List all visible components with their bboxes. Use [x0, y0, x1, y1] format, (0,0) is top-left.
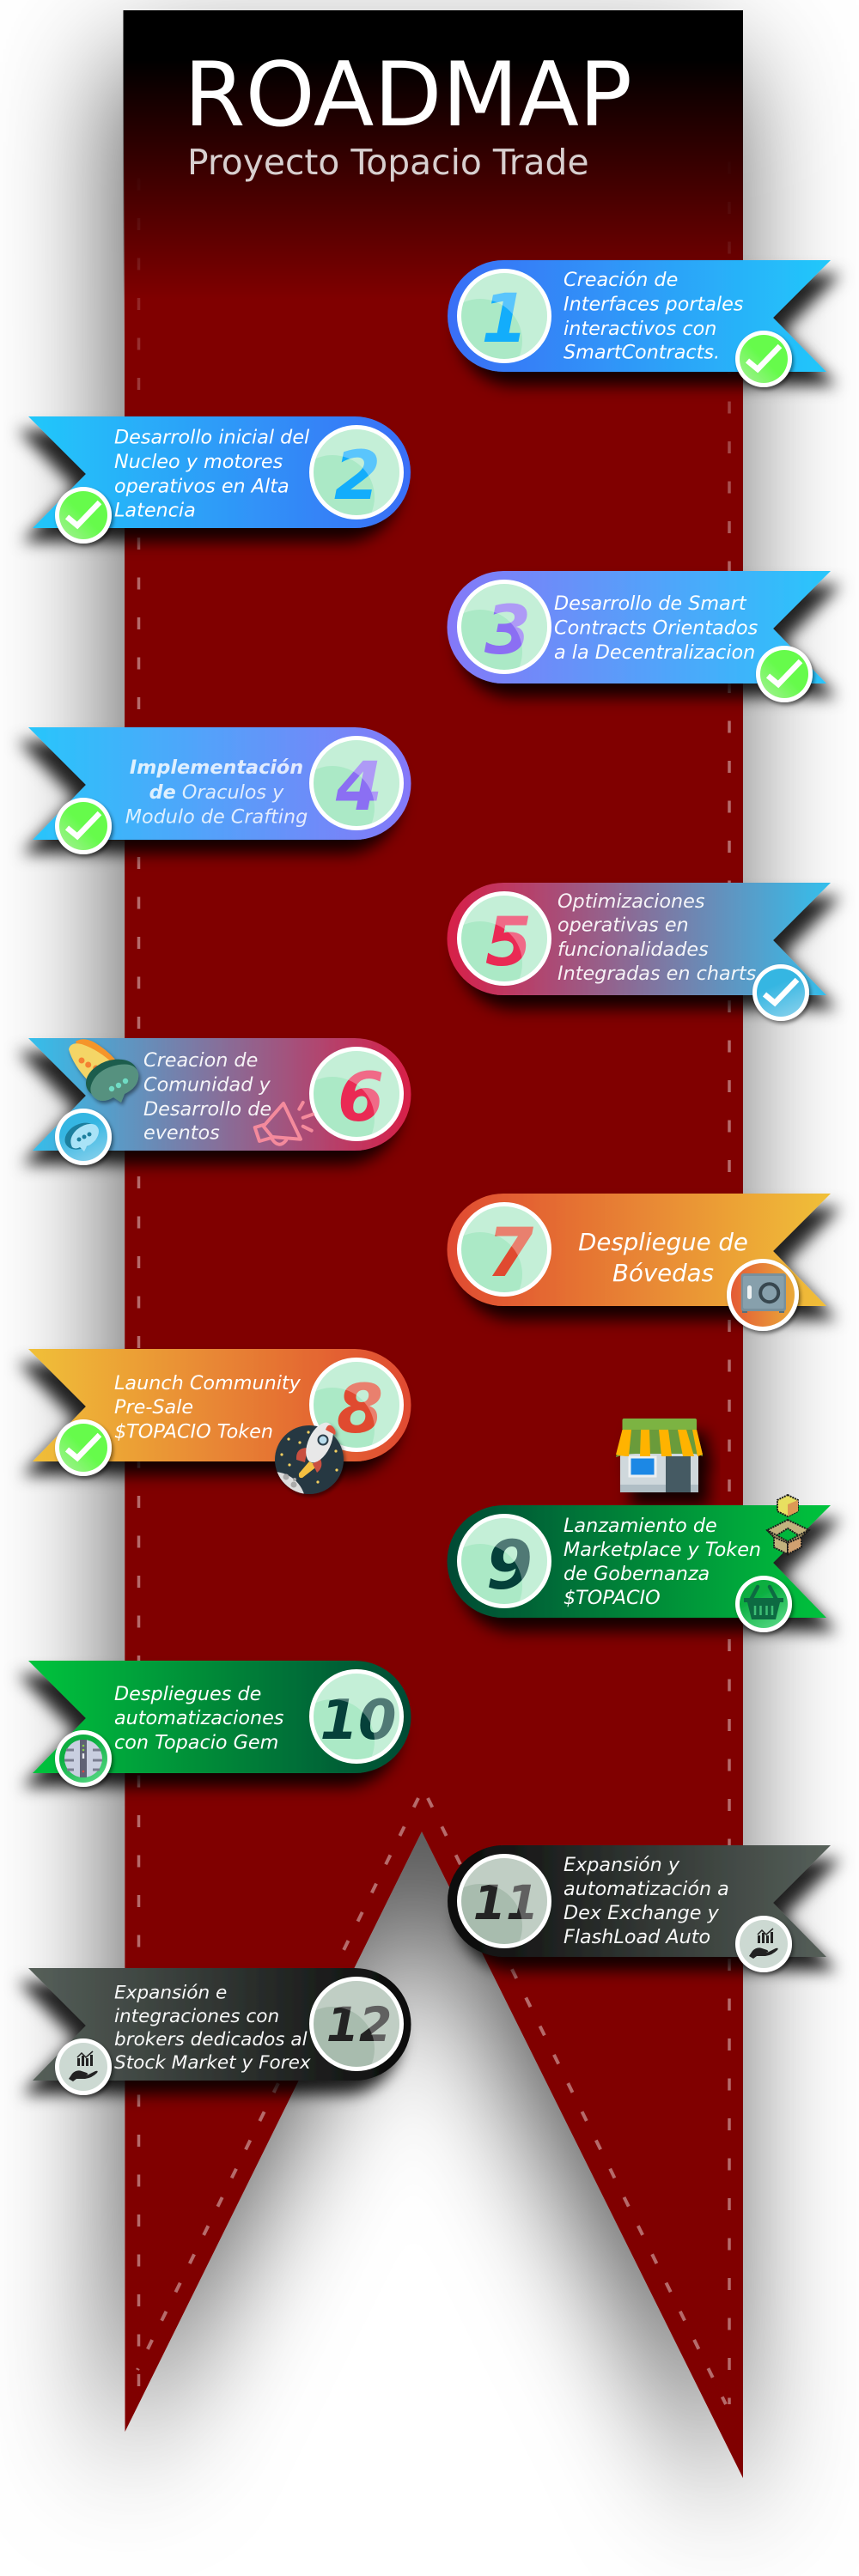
number badge 9: 9 — [486, 1528, 533, 1605]
text 2: Latencia — [114, 500, 196, 522]
ribbon background with shadow — [124, 10, 743, 2478]
banner 8 — [28, 1349, 411, 1461]
number badge 7 — [438, 1202, 551, 1316]
milestone 1 — [438, 260, 831, 387]
text 8: Launch Community — [114, 1372, 302, 1394]
icon: green chat bubble — [81, 1053, 143, 1104]
text 11: automatización a — [564, 1878, 729, 1900]
text 10: automatizaciones — [114, 1707, 284, 1729]
number badge 3 — [457, 580, 551, 674]
banner 9 — [447, 1505, 831, 1618]
text 5: funcionalidades — [557, 939, 709, 961]
text 8: $TOPACIO Token — [114, 1420, 273, 1443]
icon: road badge — [55, 1730, 112, 1787]
milestone 6 — [28, 1038, 411, 1165]
text 2: operativos en Alta — [114, 476, 289, 498]
ribbon top dark gradient — [124, 10, 743, 301]
number badge 6 — [309, 1047, 404, 1141]
text 1: interactivos con — [564, 318, 716, 340]
text 4: de Oraculos y — [149, 781, 283, 804]
icon: yellow chat bubble — [69, 1039, 118, 1082]
number badge 2: 2 — [334, 438, 381, 515]
text 1: SmartContracts. — [564, 342, 720, 364]
icon: rocket — [241, 1419, 344, 1537]
milestone 12 — [28, 1968, 411, 2095]
text 4: Modulo de Crafting — [125, 805, 308, 828]
milestone 5 — [438, 883, 831, 1021]
text 10: con Topacio Gem — [114, 1731, 278, 1753]
number badge 5 — [457, 891, 551, 986]
text 7: Despliegue de — [578, 1228, 748, 1256]
text 5: Integradas en charts — [557, 963, 757, 985]
number badge 7: 7 — [487, 1215, 534, 1292]
banner 6 — [28, 1038, 411, 1151]
text 3: Desarrollo de Smart — [554, 592, 747, 615]
text 6: Creacion de — [143, 1049, 258, 1072]
icon: blue check — [752, 964, 809, 1021]
text 8: Pre-Sale — [114, 1396, 193, 1419]
number badge 12 — [290, 1977, 404, 2091]
banner 5 — [447, 883, 831, 995]
number badge 10: 10 — [320, 1689, 397, 1753]
number badge 1: 1 — [481, 281, 528, 358]
text 6: Comunidad y — [143, 1073, 271, 1096]
number badge 11 — [438, 1854, 551, 1968]
number badge 10 — [290, 1669, 404, 1783]
text 1: Interfaces portales — [564, 294, 744, 316]
banner 3 — [447, 571, 831, 683]
number badge 8 — [290, 1358, 404, 1472]
number badge 4 — [309, 736, 404, 830]
icon: check — [55, 798, 112, 854]
ribbon stitching — [137, 161, 729, 2404]
icon: hand with chart — [735, 1916, 792, 1972]
number badge 12: 12 — [326, 1997, 392, 2052]
milestone 11 — [438, 1845, 831, 1972]
number badge 5: 5 — [485, 904, 532, 981]
title: ROADMAP — [184, 44, 632, 147]
text 5: operativas en — [557, 914, 689, 936]
milestone 8 — [28, 1349, 411, 1537]
icon: megaphone — [255, 1103, 313, 1145]
text 6: eventos — [143, 1121, 220, 1144]
icon: basket — [735, 1576, 792, 1632]
banner 4 — [28, 727, 411, 840]
text 11: Expansión y — [564, 1854, 680, 1876]
number badge 9 — [438, 1514, 551, 1628]
milestone 2 — [28, 416, 411, 544]
text 3: a la Decentralizacion — [554, 641, 755, 664]
text 4: Implementación — [130, 756, 303, 779]
number badge 4: 4 — [335, 749, 382, 826]
text 7: Bóvedas — [612, 1259, 714, 1287]
milestone 4 — [28, 727, 411, 854]
number badge 6: 6 — [338, 1060, 384, 1137]
text 3: Contracts Orientados — [554, 617, 758, 639]
text 2: Desarrollo inicial del — [114, 426, 310, 448]
milestone 9 — [438, 1495, 831, 1632]
text 9: Marketplace y Token — [564, 1539, 761, 1561]
icon: pixel gem — [777, 1495, 798, 1516]
text 12: brokers dedicados al — [114, 2029, 308, 2050]
icon: check — [55, 1419, 112, 1476]
icon: check — [756, 646, 813, 702]
icon: check — [55, 487, 112, 544]
number badge 8: 8 — [337, 1371, 383, 1449]
icon: store — [616, 1419, 703, 1492]
text 9: $TOPACIO — [564, 1587, 661, 1609]
text 10: Despliegues de — [114, 1683, 261, 1705]
text 12: Expansión e — [114, 1982, 227, 2004]
text 9: de Gobernanza — [564, 1563, 710, 1585]
icon: safe — [727, 1259, 799, 1331]
text 9: Lanzamiento de — [564, 1515, 717, 1537]
text 11: FlashLoad Auto — [564, 1926, 710, 1948]
banner 12 — [28, 1968, 411, 2081]
number badge 11: 11 — [473, 1875, 539, 1930]
milestone 10 — [28, 1661, 411, 1787]
subtitle: Proyecto Topacio Trade — [187, 142, 589, 183]
milestone 3 — [438, 571, 831, 702]
banner 1 — [448, 260, 831, 372]
banner 7 — [447, 1194, 831, 1306]
banner 2 — [28, 416, 411, 528]
text 12: Stock Market y Forex — [114, 2052, 311, 2074]
text 5: Optimizaciones — [557, 890, 705, 913]
banner 10 — [28, 1661, 411, 1773]
icon: pixel box — [767, 1520, 809, 1554]
banner 11 — [448, 1845, 831, 1957]
number badge 2 — [309, 425, 404, 519]
number badge 3: 3 — [484, 592, 531, 670]
icon: check — [735, 331, 792, 387]
text 6: Desarrollo de — [143, 1098, 271, 1121]
text 2: Nucleo y motores — [114, 451, 283, 473]
milestone 7 — [438, 1194, 831, 1331]
icon: hand with chart — [55, 2038, 112, 2095]
text 1: Creación de — [564, 269, 678, 291]
number badge 1 — [457, 269, 551, 363]
icon: chat badge — [55, 1109, 112, 1165]
text 11: Dex Exchange y — [564, 1902, 720, 1924]
text 12: integraciones con — [114, 2006, 279, 2027]
